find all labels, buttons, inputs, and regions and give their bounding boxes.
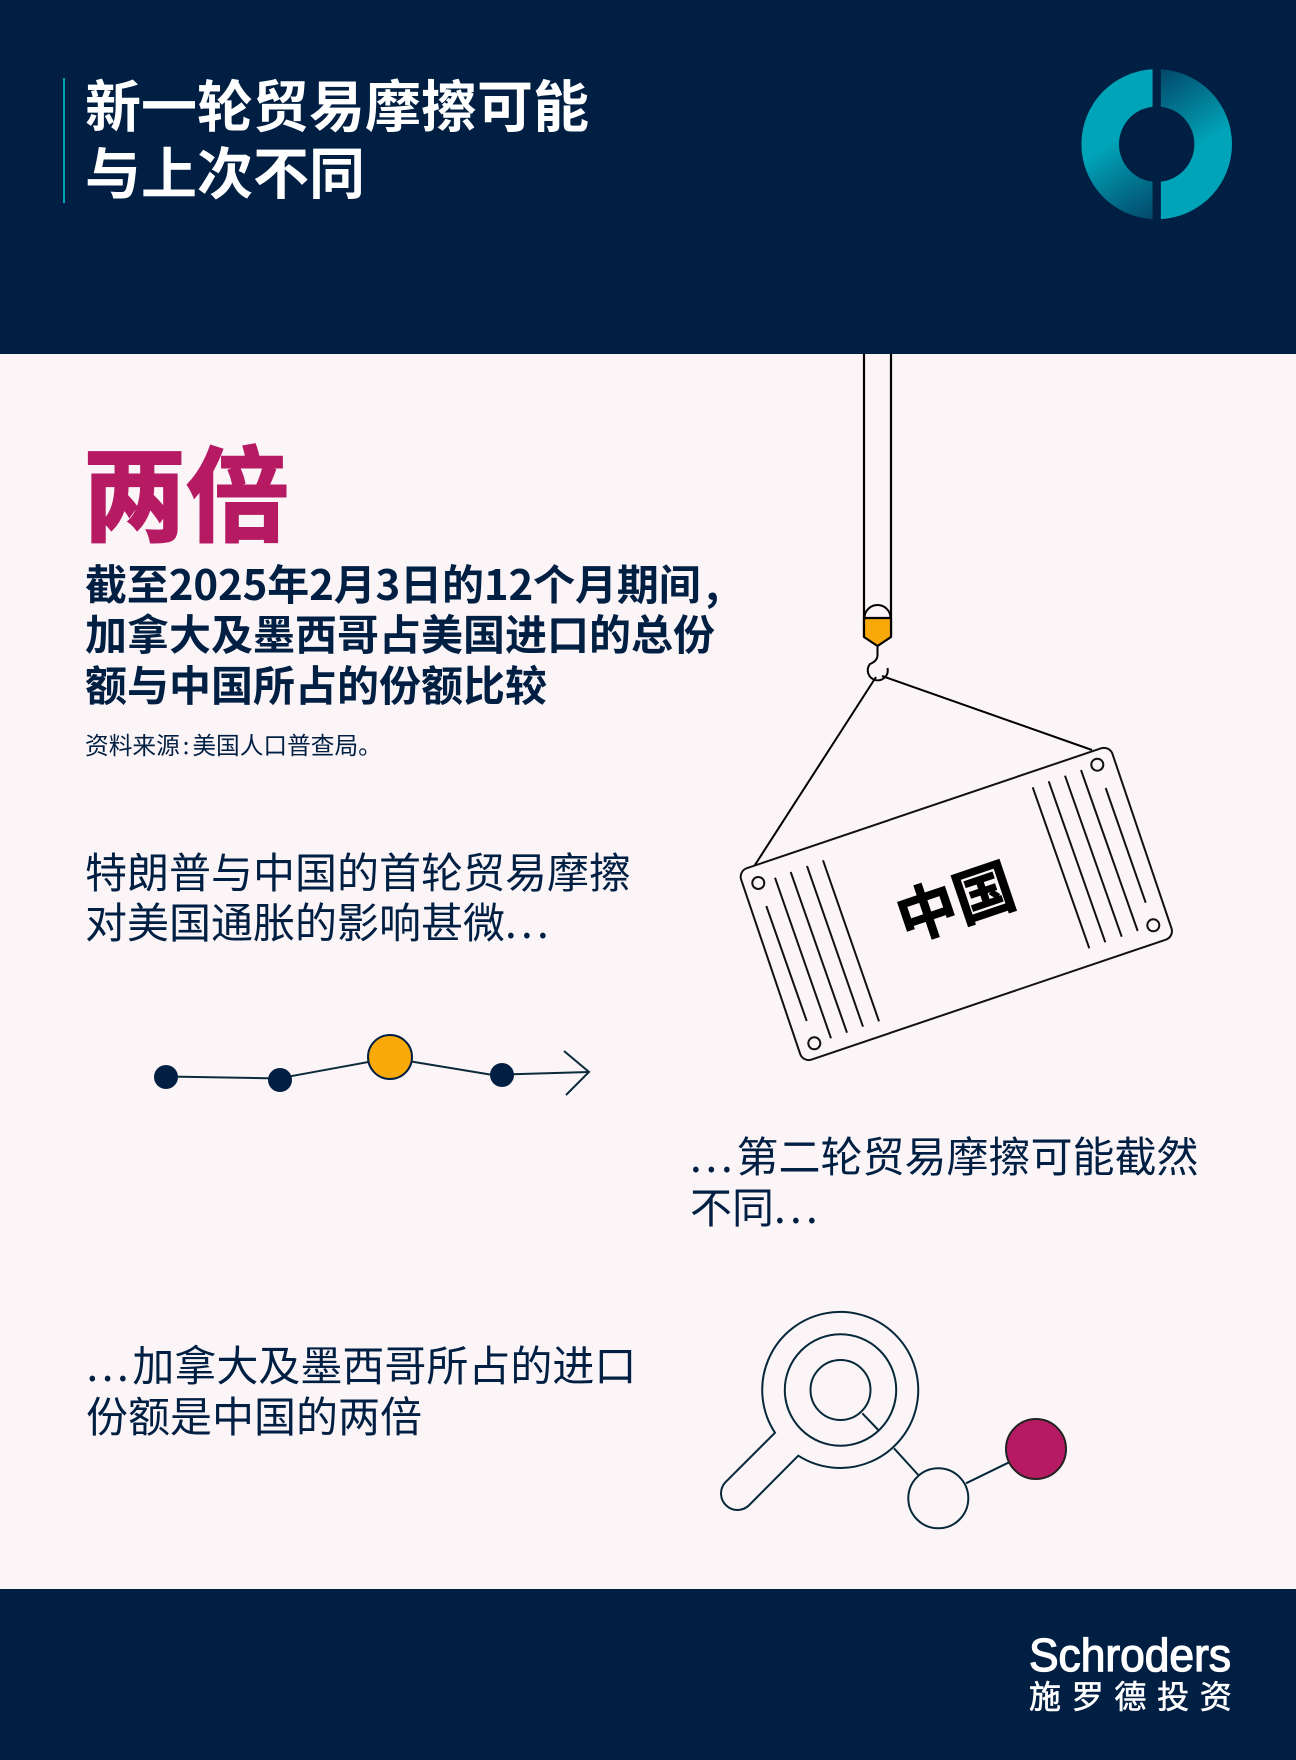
big heading: two times: 两倍 [83,414,289,563]
source note: 资料来源:美国人口普查局。 [85,727,382,761]
subheading: 加拿大及墨西哥占美国进口的总份 [85,602,715,663]
Schroders logo [1029,1629,1243,1718]
panel: footer band [0,1589,1296,1760]
text: second round: ...第二轮贸易摩擦可能截然 [690,1124,1198,1185]
icon: Schroders ring logo [1081,69,1232,219]
text: first round: 对美国通胀的影响甚微... [85,890,553,951]
subheading [85,552,719,714]
text: import share: 份额是中国的两倍 [86,1384,422,1445]
title [85,63,589,211]
text: first round: 特朗普与中国的首轮贸易摩擦 [85,840,631,901]
Schroders logo: Schroders [1029,1629,1231,1681]
container [738,745,1174,1062]
text: import share: ...加拿大及墨西哥所占的进口 [86,1333,636,1394]
connector lines [862,1413,1008,1483]
chart: inflation line with arrow [154,1035,589,1095]
text: first round [85,840,631,951]
hook [868,646,888,680]
icon: magnifier with nodes [721,1312,1066,1528]
ropes [753,676,1092,868]
text: second round [690,1124,1198,1236]
container label: 中国 [883,839,1025,959]
magnifier [721,1312,918,1510]
text: import share [86,1333,636,1445]
illustration: crane with container [738,354,1174,1062]
crane hook block [864,605,891,646]
title: 新一轮贸易摩擦可能 [85,63,589,144]
Schroders logo: 施罗德投资 [1029,1672,1243,1718]
title accent line [63,78,65,203]
arrow head [564,1051,589,1095]
crane cable [864,354,891,637]
subheading: 截至2025年2月3日的12个月期间, [85,552,719,613]
title: 与上次不同 [85,130,365,211]
text: second round: 不同... [690,1175,822,1236]
subheading: 额与中国所占的份额比较 [85,653,547,714]
panel: header band [0,0,1296,354]
magenta node [1006,1419,1066,1479]
highlighted point [368,1035,412,1079]
white node [908,1468,968,1528]
